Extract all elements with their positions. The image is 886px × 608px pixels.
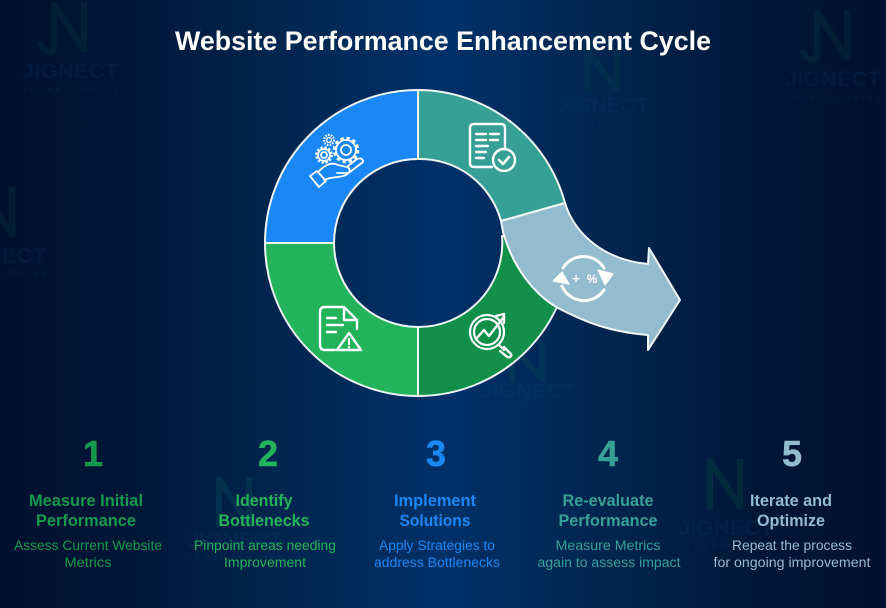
watermark logo: top right: TECHNOLOGIES [785, 95, 881, 102]
step 5 [714, 433, 871, 570]
step 5 description: for ongoing improvement [714, 555, 871, 570]
step 5 heading: Optimize [757, 512, 825, 530]
step 4 [538, 433, 681, 570]
step 1 heading: Performance [36, 512, 136, 530]
step 1 description: Metrics [64, 555, 112, 570]
step 5 number: 5 [782, 433, 802, 474]
watermark logo: below ring: JIGNECT [480, 380, 576, 403]
watermark logo: behind step 5: TECHNOLOGIES [678, 542, 774, 549]
icon: document with check [470, 124, 515, 171]
watermark logo: behind step 2: TECHNOLOGIES [187, 554, 283, 561]
watermark logo: upper centre: JIGNECT [557, 94, 649, 117]
step 3 heading: Solutions [400, 512, 470, 530]
watermark logo: upper centre [557, 49, 649, 126]
step 1 number: 1 [83, 433, 103, 474]
watermark logo: top right: JIGNECT [785, 68, 881, 91]
step 4 description: Measure Metrics [556, 538, 661, 553]
icon: magnifier with trend arrow [470, 314, 511, 357]
watermark logo: top right [785, 10, 881, 102]
step 4 heading: Performance [558, 512, 658, 530]
step 4 description: again to assess impact [538, 555, 681, 570]
segment: measure initial performance (dark green) [418, 236, 571, 396]
icon: iteration cycle: % [587, 272, 598, 286]
step 5 description: Repeat the process [732, 538, 852, 553]
step 3 number: 3 [426, 433, 446, 474]
step 5 heading: Iterate and [750, 492, 832, 510]
step 1 heading: Measure Initial [29, 492, 143, 510]
step 1 description: Assess Current Website [14, 538, 162, 553]
watermark logo: top left: TECHNOLOGIES [22, 87, 118, 94]
watermark logo: top left [22, 2, 118, 94]
icon: document with warning [320, 307, 361, 350]
step 3 description: address Bottlenecks [374, 555, 500, 570]
watermark logo: behind step 2: JIGNECT [187, 529, 283, 552]
segment: identify bottlenecks (green) [265, 243, 418, 396]
watermark logo: upper centre: TECHNOLOGIES [557, 119, 649, 126]
step 2 number: 2 [258, 433, 278, 474]
title: Website Performance Enhancement Cycle [175, 26, 711, 56]
arrow: iterate and optimize [501, 203, 680, 350]
watermark logo: behind step 5: JIGNECT [678, 517, 774, 540]
step 2 heading: Identify [236, 492, 293, 510]
step 1 [14, 433, 162, 570]
step 4 heading: Re-evaluate [562, 492, 654, 510]
segment: implement solutions (blue) [265, 90, 418, 243]
step 2 description: Pinpoint areas needing [194, 538, 336, 553]
step 2 heading: Bottlenecks [218, 512, 310, 530]
watermark logo: below ring: TECHNOLOGIES [480, 405, 576, 412]
step 3 [374, 433, 500, 570]
step 3 heading: Implement [394, 492, 476, 510]
icon: iteration cycle [553, 256, 613, 301]
watermark logo: left [0, 187, 46, 277]
segment: re-evaluate performance (teal) [418, 90, 565, 221]
watermark logo: behind step 2 [187, 477, 283, 561]
watermark logo: top left: JIGNECT [22, 60, 118, 83]
watermark logo: behind step 5 [678, 459, 774, 549]
cycle diagram [265, 90, 680, 396]
icon: hand with gears [310, 135, 363, 187]
step 2 [194, 433, 336, 570]
step 3 description: Apply Strategies to [379, 538, 495, 553]
watermark logo: below ring [480, 342, 576, 412]
step 4 number: 4 [598, 433, 618, 474]
icon: iteration cycle: + [572, 271, 580, 286]
step 2 description: Improvement [224, 555, 306, 570]
